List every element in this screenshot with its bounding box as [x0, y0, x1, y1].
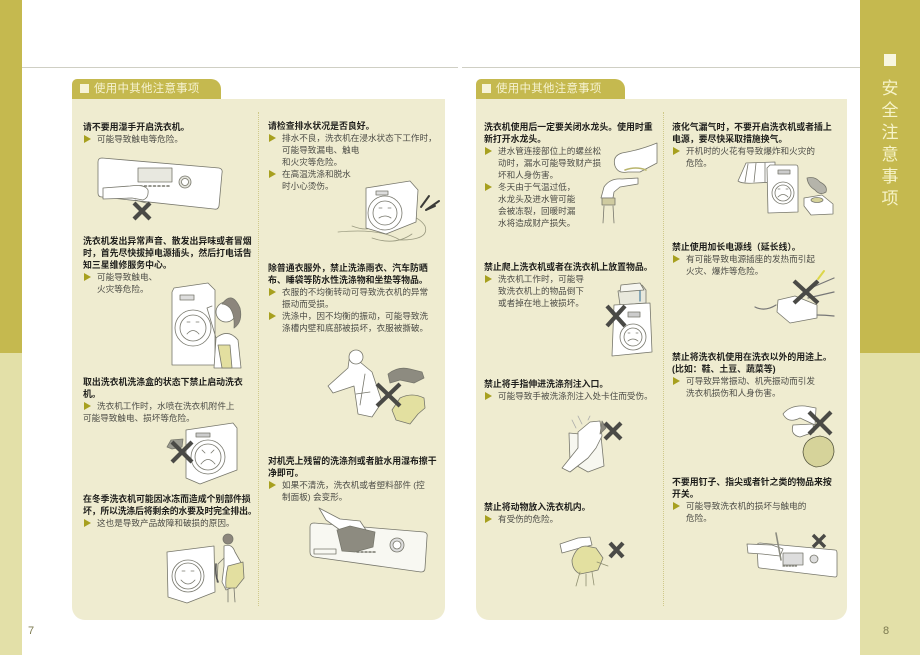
- text: gas leak: 开机时的火花有导致爆炸和火灾的: [686, 146, 815, 156]
- text: abnormal sound: [83, 236, 252, 294]
- text: abnormal sound: 时，首先尽快拔掉电源插头，然后打电话告: [83, 248, 252, 258]
- text: close the tap: 动时，漏水可能导致财产损: [498, 158, 601, 168]
- text: waterproof items: 洗涤中，因不均衡的振动，可能导致洗: [282, 311, 428, 321]
- text: animals: 有受伤的危险。: [498, 514, 558, 524]
- sidebar title: [882, 54, 898, 208]
- sidebar title: 事: [882, 167, 898, 186]
- text: close the tap: 水将造成财产损失。: [498, 218, 575, 228]
- right sidebar, dark: [860, 0, 920, 353]
- text: other uses: [672, 352, 832, 398]
- icon: shoes and potato with cross: [783, 406, 834, 467]
- text: check drainage: [268, 121, 437, 191]
- text: other uses: 洗衣机损伤和人身伤害。: [686, 388, 781, 398]
- text: abnormal sound: 洗衣机发出异常声音、散发出异味或者冒烟: [83, 236, 252, 246]
- text: close the tap: 坏和人身伤害。: [498, 170, 558, 180]
- text: do not climb: 或者掉在地上被损坏。: [498, 298, 584, 308]
- text: winter freezing: [83, 494, 256, 528]
- icon: worried woman beside washer: [172, 283, 241, 368]
- text: other uses: (比如：鞋、土豆、蔬菜等): [672, 364, 776, 374]
- icon: smiling washer and woman draining: [167, 534, 244, 603]
- text: fingers in drawer: 可能导致手被洗涤剂注入处卡住而受伤。: [498, 391, 653, 401]
- text: waterproof items: 衣服的不均衡转动可导致洗衣机的异常: [282, 287, 428, 297]
- icon: hand in detergent drawer: [562, 416, 621, 472]
- text: winter freezing: 在冬季洗衣机可能因冰冻而造成个别部件损: [83, 494, 251, 504]
- text: check drainage: 和火灾等危险。: [282, 157, 342, 167]
- text: abnormal sound: 知三星维修服务中心。: [83, 260, 172, 270]
- text: check drainage: 排水不良，洗衣机在浸水状态下工作时，: [282, 133, 437, 143]
- sidebar title: 安: [882, 79, 898, 98]
- text: residue on cabinet: 如果不清洗，洗衣机或者塑料部件 (控: [282, 480, 425, 490]
- text: check drainage: 在高温洗涤和脱水: [282, 169, 351, 179]
- text: do not climb: 禁止爬上洗衣机或者在洗衣机上放置物品。: [484, 262, 653, 272]
- icon: cat held by hand: [560, 537, 623, 586]
- text: abnormal sound: 火灾等危险。: [97, 284, 149, 294]
- text: close the tap: 新打开水龙头。: [484, 134, 546, 144]
- text: fingers in drawer: 禁止将手指伸进洗涤剂注入口。: [484, 379, 608, 389]
- text: abnormal sound: 可能导致触电、: [97, 272, 157, 282]
- text: sharp objects: [672, 477, 832, 523]
- text: extension cord: 禁止使用加长电源线（延长线）。: [672, 242, 801, 252]
- text: extension cord: [672, 242, 815, 276]
- text: detergent drawer: 机。: [83, 389, 101, 399]
- text: wet hands: 可能导致触电等危险。: [97, 134, 183, 144]
- sidebar title: 全: [882, 101, 898, 120]
- sidebar title: 注: [882, 123, 898, 142]
- heading tab: right page: 使用中其他注意事项: [496, 83, 602, 95]
- text: waterproof items: 除普通衣服外，禁止洗涤雨衣、汽车防晒: [268, 263, 428, 273]
- text: waterproof items: 布、睡袋等防水性洗涤物和坐垫等物品。: [268, 275, 428, 285]
- text: sharp objects: 不要用钉子、指尖或者针之类的物品来按: [672, 477, 832, 487]
- right sidebar, light: [860, 353, 920, 655]
- text: close the tap: 会被冻裂，回暖时漏: [498, 206, 575, 216]
- text: check drainage: 时小心烫伤。: [282, 181, 334, 191]
- text: animals: 禁止将动物放入洗衣机内。: [484, 502, 590, 512]
- text: detergent drawer: 取出洗衣机洗涤盒的状态下禁止启动洗衣: [83, 377, 243, 387]
- icon: wet hand on control panel: [98, 158, 222, 219]
- icon: hand on tap: [601, 143, 657, 223]
- left page edge band, light: [0, 353, 22, 655]
- sidebar title: 项: [882, 189, 898, 208]
- text: gas leak: 液化气漏气时，不要开启洗衣机或者插上: [672, 122, 832, 132]
- text: do not climb: [484, 262, 653, 308]
- icon: extension cord with cross: [755, 271, 834, 323]
- text: other uses: 可导致异常振动、机壳振动而引发: [686, 376, 815, 386]
- text: detergent drawer: [83, 376, 243, 423]
- text: residue on cabinet: 净即可。: [268, 468, 304, 478]
- left page edge band, dark: [0, 0, 22, 353]
- text: close the tap: 水龙头及进水管可能: [498, 194, 575, 204]
- text: other uses: 禁止将洗衣机使用在洗衣以外的用途上。: [672, 352, 832, 362]
- text: check drainage: 请检查排水状况是否良好。: [268, 121, 374, 131]
- panel: right page: [476, 99, 847, 620]
- text: check drainage: 可能导致漏电、触电: [282, 145, 359, 155]
- icon: wiping the control panel: [310, 508, 427, 572]
- text: wet hands: [83, 122, 190, 144]
- text: sharp objects: 危险。: [686, 513, 712, 523]
- icon: washer on wet floor: [338, 181, 439, 241]
- text: close the tap: 进水管连接部位上的螺丝松: [498, 146, 601, 156]
- text: waterproof items: 振动而受损。: [282, 299, 334, 309]
- heading tab: left page: 使用中其他注意事项: [94, 83, 200, 95]
- text: waterproof items: 涤槽内壁和底部被损坏，衣服被撕破。: [282, 323, 428, 333]
- text: animals: [484, 502, 590, 524]
- text: winter freezing: 坏，所以洗涤后将剩余的水要及时完全排出。: [83, 506, 256, 516]
- text: gas leak: 危险。: [686, 158, 712, 168]
- text: residue on cabinet: [268, 456, 437, 502]
- text: sharp objects: 可能导致洗衣机的损坏与触电的: [686, 501, 806, 511]
- text: wet hands: 请不要用湿手开启洗衣机。: [83, 122, 190, 132]
- heading tab: left page: [72, 79, 221, 99]
- text: winter freezing: 这也是导致产品故障和破损的原因。: [97, 518, 235, 528]
- text: extension cord: 有可能导致电源插座的发热而引起: [686, 254, 815, 264]
- text: residue on cabinet: 对机壳上残留的洗涤剂或者脏水用湿布擦干: [268, 456, 437, 466]
- page number 8: 8: [883, 625, 889, 637]
- text: close the tap: 冬天由于气温过低，: [498, 182, 575, 192]
- text: do not climb: 致洗衣机上的物品倒下: [498, 286, 584, 296]
- page number 7: 7: [28, 625, 34, 637]
- text: extension cord: 火灾、爆炸等危险。: [686, 266, 763, 276]
- icon: pin on control panel with cross: [747, 533, 837, 577]
- sidebar title: 意: [882, 145, 898, 164]
- heading tab: right page: [476, 79, 625, 99]
- text: gas leak: 电源，要尽快采取措施换气。: [672, 134, 787, 144]
- text: gas leak: [672, 122, 832, 168]
- text: fingers in drawer: [484, 379, 653, 401]
- text: close the tap: [484, 122, 653, 228]
- panel: left page: [72, 99, 445, 620]
- text: residue on cabinet: 制面板) 会变形。: [282, 492, 347, 502]
- icon: jacket and bedding with cross: [328, 350, 425, 424]
- icon: objects on top of washer: [607, 283, 652, 356]
- text: do not climb: 洗衣机工作时，可能导: [498, 274, 584, 284]
- text: waterproof items: [268, 263, 428, 333]
- text: detergent drawer: 可能导致触电、损坏等危险。: [83, 413, 195, 423]
- icon: washer without drawer: [167, 423, 237, 484]
- text: close the tap: 洗衣机使用后一定要关闭水龙头。使用时重: [484, 122, 653, 132]
- text: sharp objects: 开关。: [672, 489, 699, 499]
- icon: gas leak beside washer: [738, 162, 833, 215]
- text: detergent drawer: 洗衣机工作时，水喷在洗衣机附件上: [97, 401, 235, 411]
